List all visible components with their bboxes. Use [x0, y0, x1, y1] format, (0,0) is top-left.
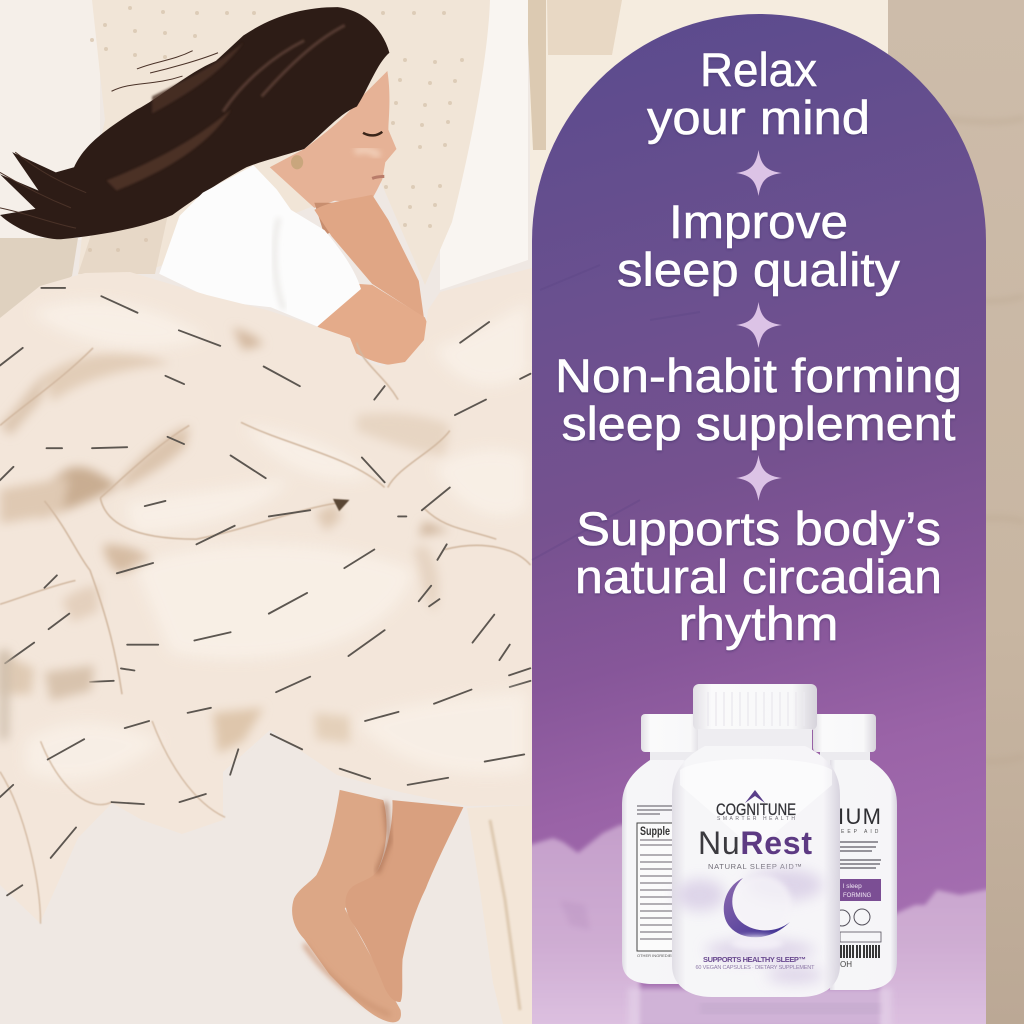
lower folds — [0, 650, 530, 924]
back pillow fold — [547, 0, 622, 55]
legs and feet — [292, 790, 463, 1022]
heading: Improve sleep quality: sleep quality — [617, 243, 901, 296]
hair — [0, 7, 389, 239]
warning box — [840, 932, 881, 942]
strip stitching — [490, 820, 520, 1010]
heading: Improve sleep quality — [617, 195, 901, 296]
heading: Relax your mind: your mind — [647, 91, 870, 144]
heading: Non-habit forming sleep supplement — [555, 349, 962, 450]
label: sleep aid: EEP AID — [841, 829, 881, 835]
logo: Cognitune: SMARTER HEALTH — [717, 816, 795, 822]
icon: star 1 — [736, 150, 782, 196]
face and neck — [270, 71, 396, 235]
label clouds — [675, 869, 823, 983]
logo: Cognitune — [716, 790, 796, 822]
blanket trailing strip — [467, 805, 532, 1024]
blanket — [0, 268, 532, 924]
product: right bottle (back) — [813, 714, 897, 990]
fold strip — [526, 0, 546, 150]
forearm — [314, 195, 424, 317]
cloud puff — [731, 936, 783, 950]
moon disc — [732, 875, 792, 935]
product: left bottle (back) — [622, 714, 703, 984]
icon: star 3 — [736, 455, 782, 501]
dark gap between folds — [333, 499, 349, 511]
icon: star 2 — [736, 302, 782, 348]
label: purple box: l sleep — [843, 883, 862, 890]
upper folds — [0, 288, 530, 694]
white shirt — [159, 165, 361, 327]
product name: NuRest: NuRest — [698, 825, 812, 861]
heading: Improve sleep quality: Improve — [669, 195, 848, 248]
badges — [834, 909, 870, 926]
clouds — [520, 825, 1000, 1024]
top bed linen — [530, 0, 888, 200]
claim: SUPPORTS HEALTHY SLEEP™ — [703, 955, 806, 964]
heading: Supports body's natural circadian rhythm: Supports body’s — [576, 502, 941, 555]
white pillow — [440, 0, 528, 290]
product: front NuRest bottle — [672, 684, 840, 997]
supplement facts label: OTHER INGREDIENTS — [637, 953, 680, 958]
supplement facts label: Supple — [640, 824, 670, 838]
label: IUM: IUM — [838, 804, 881, 829]
heading: Supports body's natural circadian rhythm: rhythm — [678, 597, 838, 650]
upper arm — [317, 284, 431, 366]
heading: Relax your mind: Relax — [700, 43, 817, 96]
icon: crescent moon — [724, 878, 790, 937]
label: purple box — [840, 879, 881, 901]
shirt shadow — [275, 218, 284, 309]
heading: Non-habit forming sleep supplement: Non-habit forming — [555, 349, 962, 402]
stripes upper — [0, 288, 530, 692]
logo: Cognitune: COGNITUNE — [716, 800, 796, 819]
heading: Supports body's natural circadian rhythm: natural circadian — [575, 550, 942, 603]
product reflection — [628, 988, 892, 1024]
panel: purple arch — [520, 14, 1000, 1024]
stripes lower — [0, 668, 530, 895]
fold lines — [0, 343, 530, 694]
heading: Relax your mind — [647, 43, 870, 144]
woman upper body — [0, 7, 431, 366]
count: 60 VEGAN CAPSULES · DIETARY SUPPLEMENT — [696, 965, 815, 971]
heading: Supports body's natural circadian rhythm — [575, 502, 942, 650]
beige under-layer — [0, 238, 78, 325]
subtitle: NATURAL SLEEP AID™ — [708, 862, 802, 871]
wood floor — [888, 0, 1024, 1024]
patterned pillow — [78, 0, 490, 285]
supplement facts label — [637, 806, 680, 958]
label: purple box: FORMING — [843, 893, 872, 899]
heading: Non-habit forming sleep supplement: sleep supplement — [562, 397, 956, 450]
headboard side sheet — [0, 0, 100, 240]
barcode — [840, 945, 879, 969]
barcode: OH — [840, 960, 852, 969]
label: body copy — [840, 842, 881, 868]
